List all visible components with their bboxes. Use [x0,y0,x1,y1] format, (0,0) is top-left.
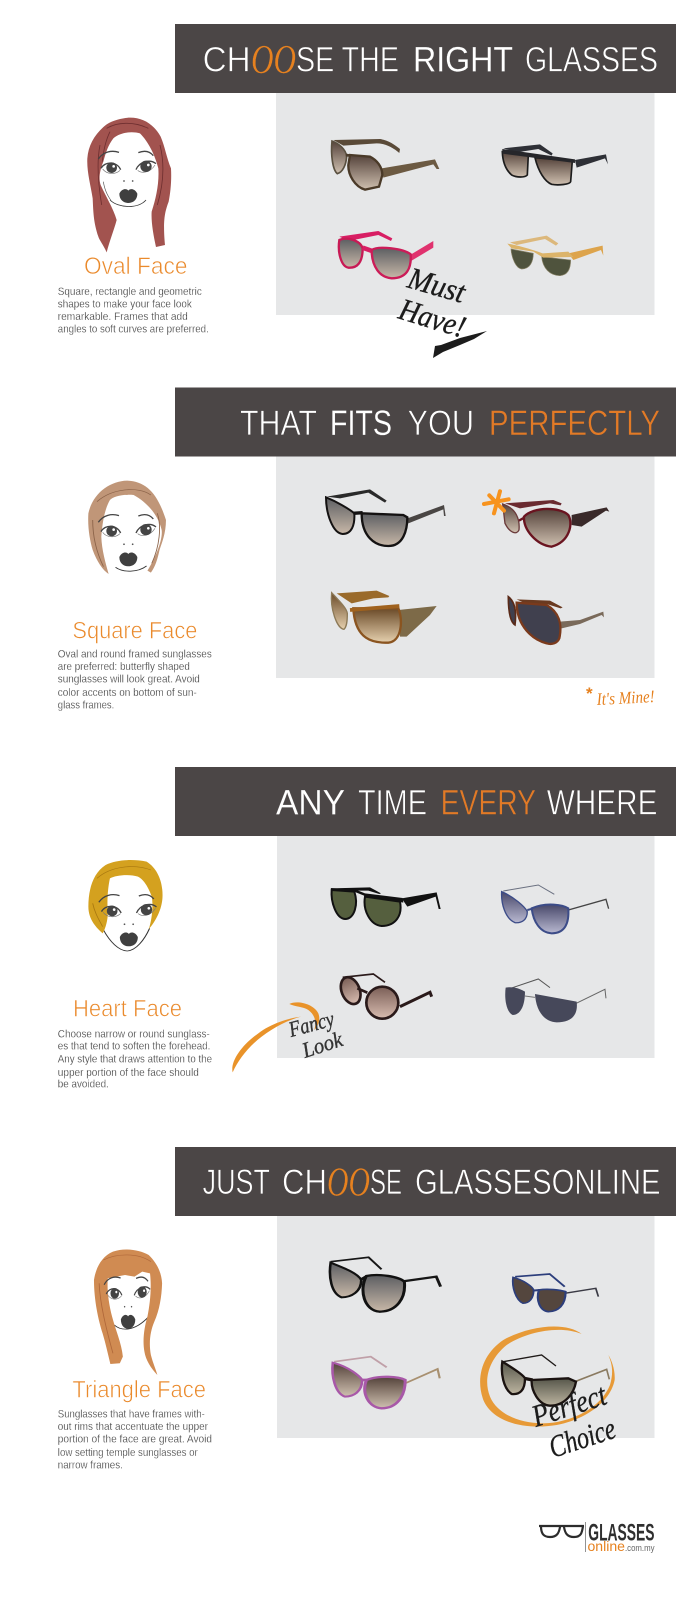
face title: oval face: Oval Face [84,253,188,280]
description: oval face [58,286,209,336]
sunglasses: tortoise square [332,139,439,190]
heading: any time every where: EVERY [441,782,536,822]
description: triangle face [58,1409,212,1471]
heading: that fits you perfectly: YOU [408,403,474,443]
heading: any time every where: ANY [276,782,345,822]
description: oval face: angles to soft curves are preferred. [58,324,209,336]
description: square face: color accents on bottom of sun- [58,687,197,699]
heading: just choose glassesonline: JUST [203,1162,270,1202]
annotation: perfect choice: Perfect [527,1377,612,1434]
grey panel: square face glasses [276,456,654,678]
description: heart face: Any style that draws attention to the [58,1054,212,1066]
heading: choose the right glasses: OO [251,36,296,82]
description: oval face: shapes to make your face look [58,298,192,310]
icon: orange swoosh [232,1002,319,1072]
annotation: it's mine: It's Mine! [595,686,655,709]
description: heart face: upper portion of the face should [58,1067,199,1079]
sunglasses: small blue [513,1274,598,1312]
description: square face: sunglasses will look great. Avoid [58,674,200,686]
sunglasses: gold browline [507,236,603,276]
heading: choose the right glasses: CH [203,40,251,80]
icon: brush stroke [433,331,487,358]
section: heart face [58,767,676,1091]
sunglasses: black round [337,974,432,1019]
icon: logo glasses [539,1526,584,1537]
heading: choose the right glasses: SE THE [296,40,399,80]
logo: glasses online: online [588,1538,625,1554]
sunglasses: rimless navy [505,979,606,1022]
description: square face [58,649,212,711]
logo: glasses online: .com.my [625,1543,655,1553]
grey panel: triangle face glasses [277,1216,654,1438]
sunglasses: black green [331,887,441,926]
grey panel: oval face glasses [276,93,654,315]
description: square face: Oval and round framed sunglasses [58,649,212,661]
description: triangle face: out rims that accentuate the upper [58,1421,208,1433]
description: heart face: Choose narrow or round sunglass- [58,1029,210,1041]
sunglasses: tortoise aviator [508,597,604,644]
logo: glasses online [539,1520,655,1554]
face title: square face: Square Face [72,617,197,644]
heading: any time every where: WHERE [547,782,658,822]
annotation: it's mine: * [586,684,593,703]
sunglasses: black round cat [330,1257,441,1312]
heading: just choose glassesonline: OO [327,1158,370,1204]
illustration: triangle face [94,1249,162,1375]
heading: that fits you perfectly: FITS [330,403,392,443]
sunglasses: blue cat eye [502,885,609,933]
heading: that fits you perfectly: THAT [240,403,317,443]
heading: any time every where [175,767,676,836]
annotation: fancy look [232,1002,347,1072]
sunglasses: black cat eye [326,489,446,546]
annotation: perfect choice: Choice [544,1410,620,1465]
description: triangle face: portion of the face are great. Avoid [58,1434,212,1446]
description: triangle face: Sunglasses that have frames with- [58,1409,205,1421]
heading: just choose glassesonline: SE [370,1162,402,1202]
illustration: square face [88,481,166,574]
section: triangle face [58,1147,676,1471]
sunglasses: burgundy round [484,491,609,547]
section: oval face [58,24,676,358]
heading: just choose glassesonline [175,1147,676,1216]
heading: choose the right glasses [175,24,676,93]
illustration: heart face [88,860,163,951]
heading: just choose glassesonline: CH [282,1162,327,1202]
heading: that fits you perfectly [175,388,676,456]
description: heart face: es that tend to soften the forehead. [58,1040,210,1052]
sunglasses: pink [339,231,433,278]
face title: heart face: Heart Face [73,996,182,1023]
heading: choose the right glasses: RIGHT [413,40,513,80]
annotation: must have: Must [403,260,471,310]
sunglasses: perfect choice pair [502,1355,609,1406]
description: triangle face: narrow frames. [58,1459,123,1471]
description: heart face [58,1029,212,1091]
annotation: must have [394,260,487,358]
sunglasses: pink tortoise [332,1357,440,1408]
section: square face [58,388,676,711]
illustration: oval face [87,118,171,252]
annotation: fancy look: Look [298,1026,347,1063]
heading: any time every where: TIME [358,782,427,822]
description: heart face: be avoided. [58,1079,109,1091]
sunglasses: leopard [331,591,437,643]
annotation: fancy look: Fancy [285,1006,337,1042]
description: square face: glass frames. [58,699,114,711]
orange circle swoosh [480,1326,615,1427]
annotation: must have: Have! [394,291,470,345]
description: oval face: remarkable. Frames that add [58,311,188,323]
icon: orange asterisk [484,491,509,513]
description: square face: are preferred: butterfly shaped [58,661,190,673]
grey panel: heart face glasses [277,836,654,1058]
face title: triangle face: Triangle Face [72,1376,206,1403]
description: oval face: Square, rectangle and geometric [58,286,202,298]
description: triangle face: low setting temple sunglasses or [58,1447,198,1459]
sunglasses: black flat top [502,144,608,185]
annotation: perfect choice [480,1326,620,1465]
